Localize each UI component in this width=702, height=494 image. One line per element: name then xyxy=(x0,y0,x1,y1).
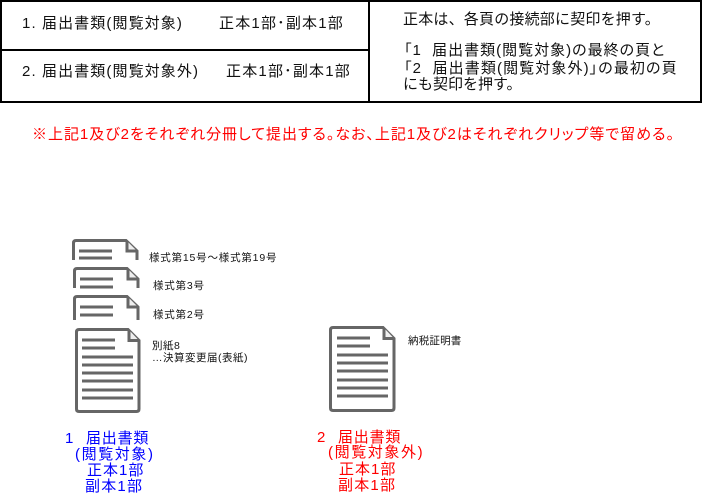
seal instruction text: 「2 届出書類(閲覧対象外)」の最初の頁 xyxy=(404,60,678,77)
row 2 label: 2. 届出書類(閲覧対象外) xyxy=(22,63,199,80)
caption: group 1: 1 xyxy=(65,430,74,447)
icon: document tax certificate xyxy=(330,328,394,410)
label: tax certificate: 納税証明書 xyxy=(408,335,462,347)
red note: ※上記1及び2をそれぞれ分冊して提出する。なお、上記1及び2はそれぞれクリップ等で留める。 xyxy=(32,126,675,143)
icon: document stack sheet 3 xyxy=(74,296,138,320)
caption: group 2: (閲覧対象外) xyxy=(328,444,424,461)
caption: group 2: 正本1部 xyxy=(339,461,396,478)
caption: group 1 xyxy=(65,430,155,494)
seal instruction text: 正本は、各頁の接続部に契印を押す。 xyxy=(403,11,660,28)
caption: group 1: 正本1部 xyxy=(87,462,144,479)
icon: document stack sheet 1 xyxy=(74,240,137,260)
caption: group 1: (閲覧対象) xyxy=(75,446,155,463)
row 1 copies: 正本1部･副本1部 xyxy=(219,15,344,32)
caption: group 2: 2 xyxy=(317,429,326,446)
label: form 2: 様式第2号 xyxy=(153,309,205,321)
caption: group 2 xyxy=(317,429,424,494)
label: form 3: 様式第3号 xyxy=(153,280,205,292)
row 1 label: 1. 届出書類(閲覧対象) xyxy=(22,15,183,32)
row 2 copies: 正本1部･副本1部 xyxy=(226,63,351,80)
caption: group 2: 届出書類 xyxy=(338,429,401,446)
caption: group 1: 届出書類 xyxy=(86,430,149,447)
seal instruction text: 「1 届出書類(閲覧対象)の最終の頁と xyxy=(404,42,665,59)
seal instruction text xyxy=(403,11,678,93)
icon: document form 8 xyxy=(76,330,139,412)
label: forms 15 to 19: 様式第15号～様式第19号 xyxy=(149,252,277,264)
seal instruction text: にも契印を押す。 xyxy=(403,76,522,93)
icon: document stack sheet 2 xyxy=(74,268,138,288)
caption: group 2: 副本1部 xyxy=(338,477,396,494)
table panel xyxy=(0,0,702,103)
label: form 8: 別紙8 …決算変更届(表紙) xyxy=(152,340,248,364)
